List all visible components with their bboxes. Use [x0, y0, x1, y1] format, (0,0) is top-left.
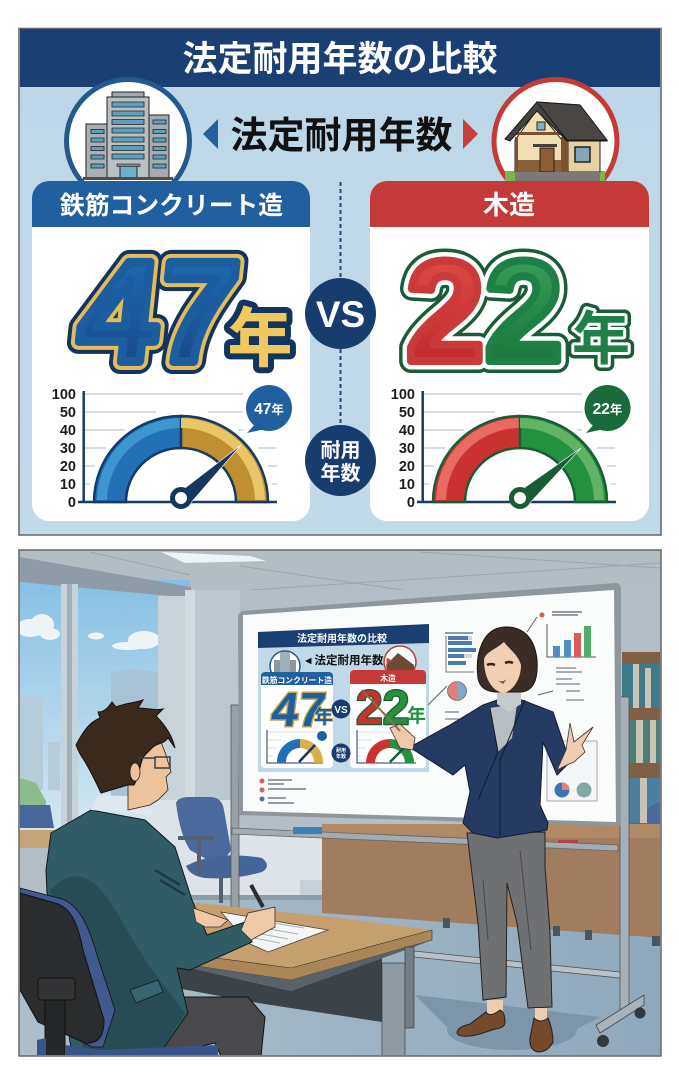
big number 22 years: 2 — [406, 232, 484, 392]
value bubble — [246, 385, 292, 433]
gauge chart: 22 years — [391, 385, 630, 511]
gauge chart: 47 years: 50 — [60, 405, 76, 421]
man jacket — [46, 810, 252, 1056]
gauge chart: 22 years: 20 — [399, 459, 415, 475]
mini VS badge — [332, 700, 350, 718]
desk — [156, 902, 432, 1056]
man hands and pen — [193, 885, 275, 940]
board chart: vertical bars — [540, 612, 596, 657]
wall — [145, 590, 322, 900]
mini useful life badge: 耐用 — [336, 747, 346, 754]
left arrow — [203, 119, 218, 149]
mini icons — [269, 650, 301, 672]
mini useful life badge — [332, 744, 350, 762]
pointer — [362, 690, 400, 731]
background desk and chairs — [20, 797, 267, 903]
board notes under mini infographic — [268, 780, 306, 803]
panel: comparison infographic — [19, 28, 661, 535]
icon: wooden house in circle — [492, 77, 620, 181]
woman presenter — [362, 627, 600, 1052]
panel: office illustration — [16, 550, 662, 1056]
board chart: horizontal bars — [445, 633, 476, 672]
big number 22 years: 2 — [484, 232, 563, 392]
mini card left — [261, 672, 333, 768]
trousers — [467, 832, 552, 1008]
card header — [32, 181, 310, 227]
jacket and arms — [412, 690, 570, 838]
mini card left: 年 — [314, 705, 333, 728]
bookshelf — [622, 652, 662, 832]
gauge chart: 47 years: 30 — [60, 441, 76, 457]
board stand — [231, 697, 646, 1047]
gauge chart: 47 years: 10 — [60, 477, 76, 493]
badge: VS: VS — [316, 294, 365, 335]
big number 22 years: 年 — [572, 307, 630, 372]
card: reinforced concrete — [32, 181, 310, 521]
gauge chart: 47 years: 40 — [60, 423, 76, 439]
badge: VS — [305, 278, 376, 349]
value bubble: 22年 — [593, 401, 622, 418]
clouds — [16, 614, 160, 650]
notepad — [221, 912, 328, 952]
value bubble: 47年 — [254, 401, 284, 418]
badge: useful life — [305, 425, 376, 496]
seated man — [20, 700, 275, 1056]
big number 22 years: 22 — [406, 232, 563, 392]
hair and face — [477, 627, 537, 693]
gauge chart: 47 years: 100 — [52, 387, 76, 403]
man trousers — [158, 997, 265, 1056]
big number 47 years: 47 — [72, 233, 246, 393]
needle — [185, 445, 241, 505]
mini card right — [350, 670, 426, 768]
floor — [20, 900, 662, 1056]
board chart: lower right box — [547, 741, 597, 801]
ceiling — [90, 552, 660, 590]
gauge chart: 22 years: 100 — [391, 387, 415, 403]
mini card right: 木造 — [380, 673, 396, 683]
mini infographic on board — [258, 624, 429, 772]
mini title — [258, 624, 429, 648]
needle — [524, 448, 581, 505]
ankles — [487, 1000, 547, 1022]
heading: legal useful life: 法定耐用年数 — [230, 115, 452, 156]
mini useful life badge: 年数 — [336, 753, 346, 760]
gauge chart: 22 years: 30 — [399, 441, 415, 457]
mini card left: 鉄筋コンクリート造 — [262, 675, 332, 685]
marker tray — [232, 827, 618, 851]
icon: office building in circle — [64, 77, 192, 181]
gauge chart: 22 years: 0 — [407, 495, 415, 511]
mini title: 法定耐用年数の比較 — [297, 632, 387, 645]
gauge chart: 47 years — [52, 385, 292, 511]
big number 22 years: 年 — [572, 307, 630, 372]
note bullets — [260, 778, 264, 802]
board chart: pie — [448, 682, 466, 700]
card header: 木造 — [483, 190, 535, 220]
window with city view — [16, 557, 191, 844]
card: wood — [370, 181, 649, 521]
right arrow — [463, 119, 478, 149]
title bar — [20, 29, 660, 87]
gauge chart: 22 years: 40 — [399, 423, 415, 439]
man chair — [20, 888, 218, 1056]
big number 22 years: 22 — [406, 232, 563, 392]
big number 47 years: 47 — [72, 233, 246, 393]
card header — [370, 181, 649, 227]
big number 47 years: 年 — [228, 303, 292, 375]
board notes right — [445, 668, 584, 719]
background cabinet — [322, 824, 662, 946]
man head — [76, 700, 175, 815]
mini card right: 年 — [407, 704, 426, 727]
hands — [390, 723, 593, 770]
badge: useful life: 耐用 — [320, 439, 360, 462]
mini heading: ◂ 法定耐用年数 ▸ — [305, 653, 394, 667]
gauge chart: 22 years: 10 — [399, 477, 415, 493]
whiteboard — [231, 583, 646, 1047]
big number 47 years: 年 — [228, 303, 292, 375]
mini card right: 22 — [356, 682, 409, 735]
badge: useful life: 年数 — [320, 462, 360, 485]
mini card left: 47 — [269, 683, 329, 737]
gauge chart: 47 years: 20 — [60, 459, 76, 475]
board arrows — [428, 617, 553, 705]
title bar: 法定耐用年数の比較 — [182, 40, 498, 79]
gauge chart: 47 years: 0 — [68, 495, 76, 511]
shadow — [415, 995, 600, 1050]
value bubble — [584, 385, 630, 433]
gauge chart: 22 years: 50 — [399, 405, 415, 421]
card header: 鉄筋コンクリート造 — [60, 192, 283, 220]
shoes — [457, 1010, 553, 1052]
center divider line — [340, 182, 342, 425]
big number 47 years: 47 — [72, 233, 246, 393]
mini VS badge: VS — [334, 705, 348, 716]
